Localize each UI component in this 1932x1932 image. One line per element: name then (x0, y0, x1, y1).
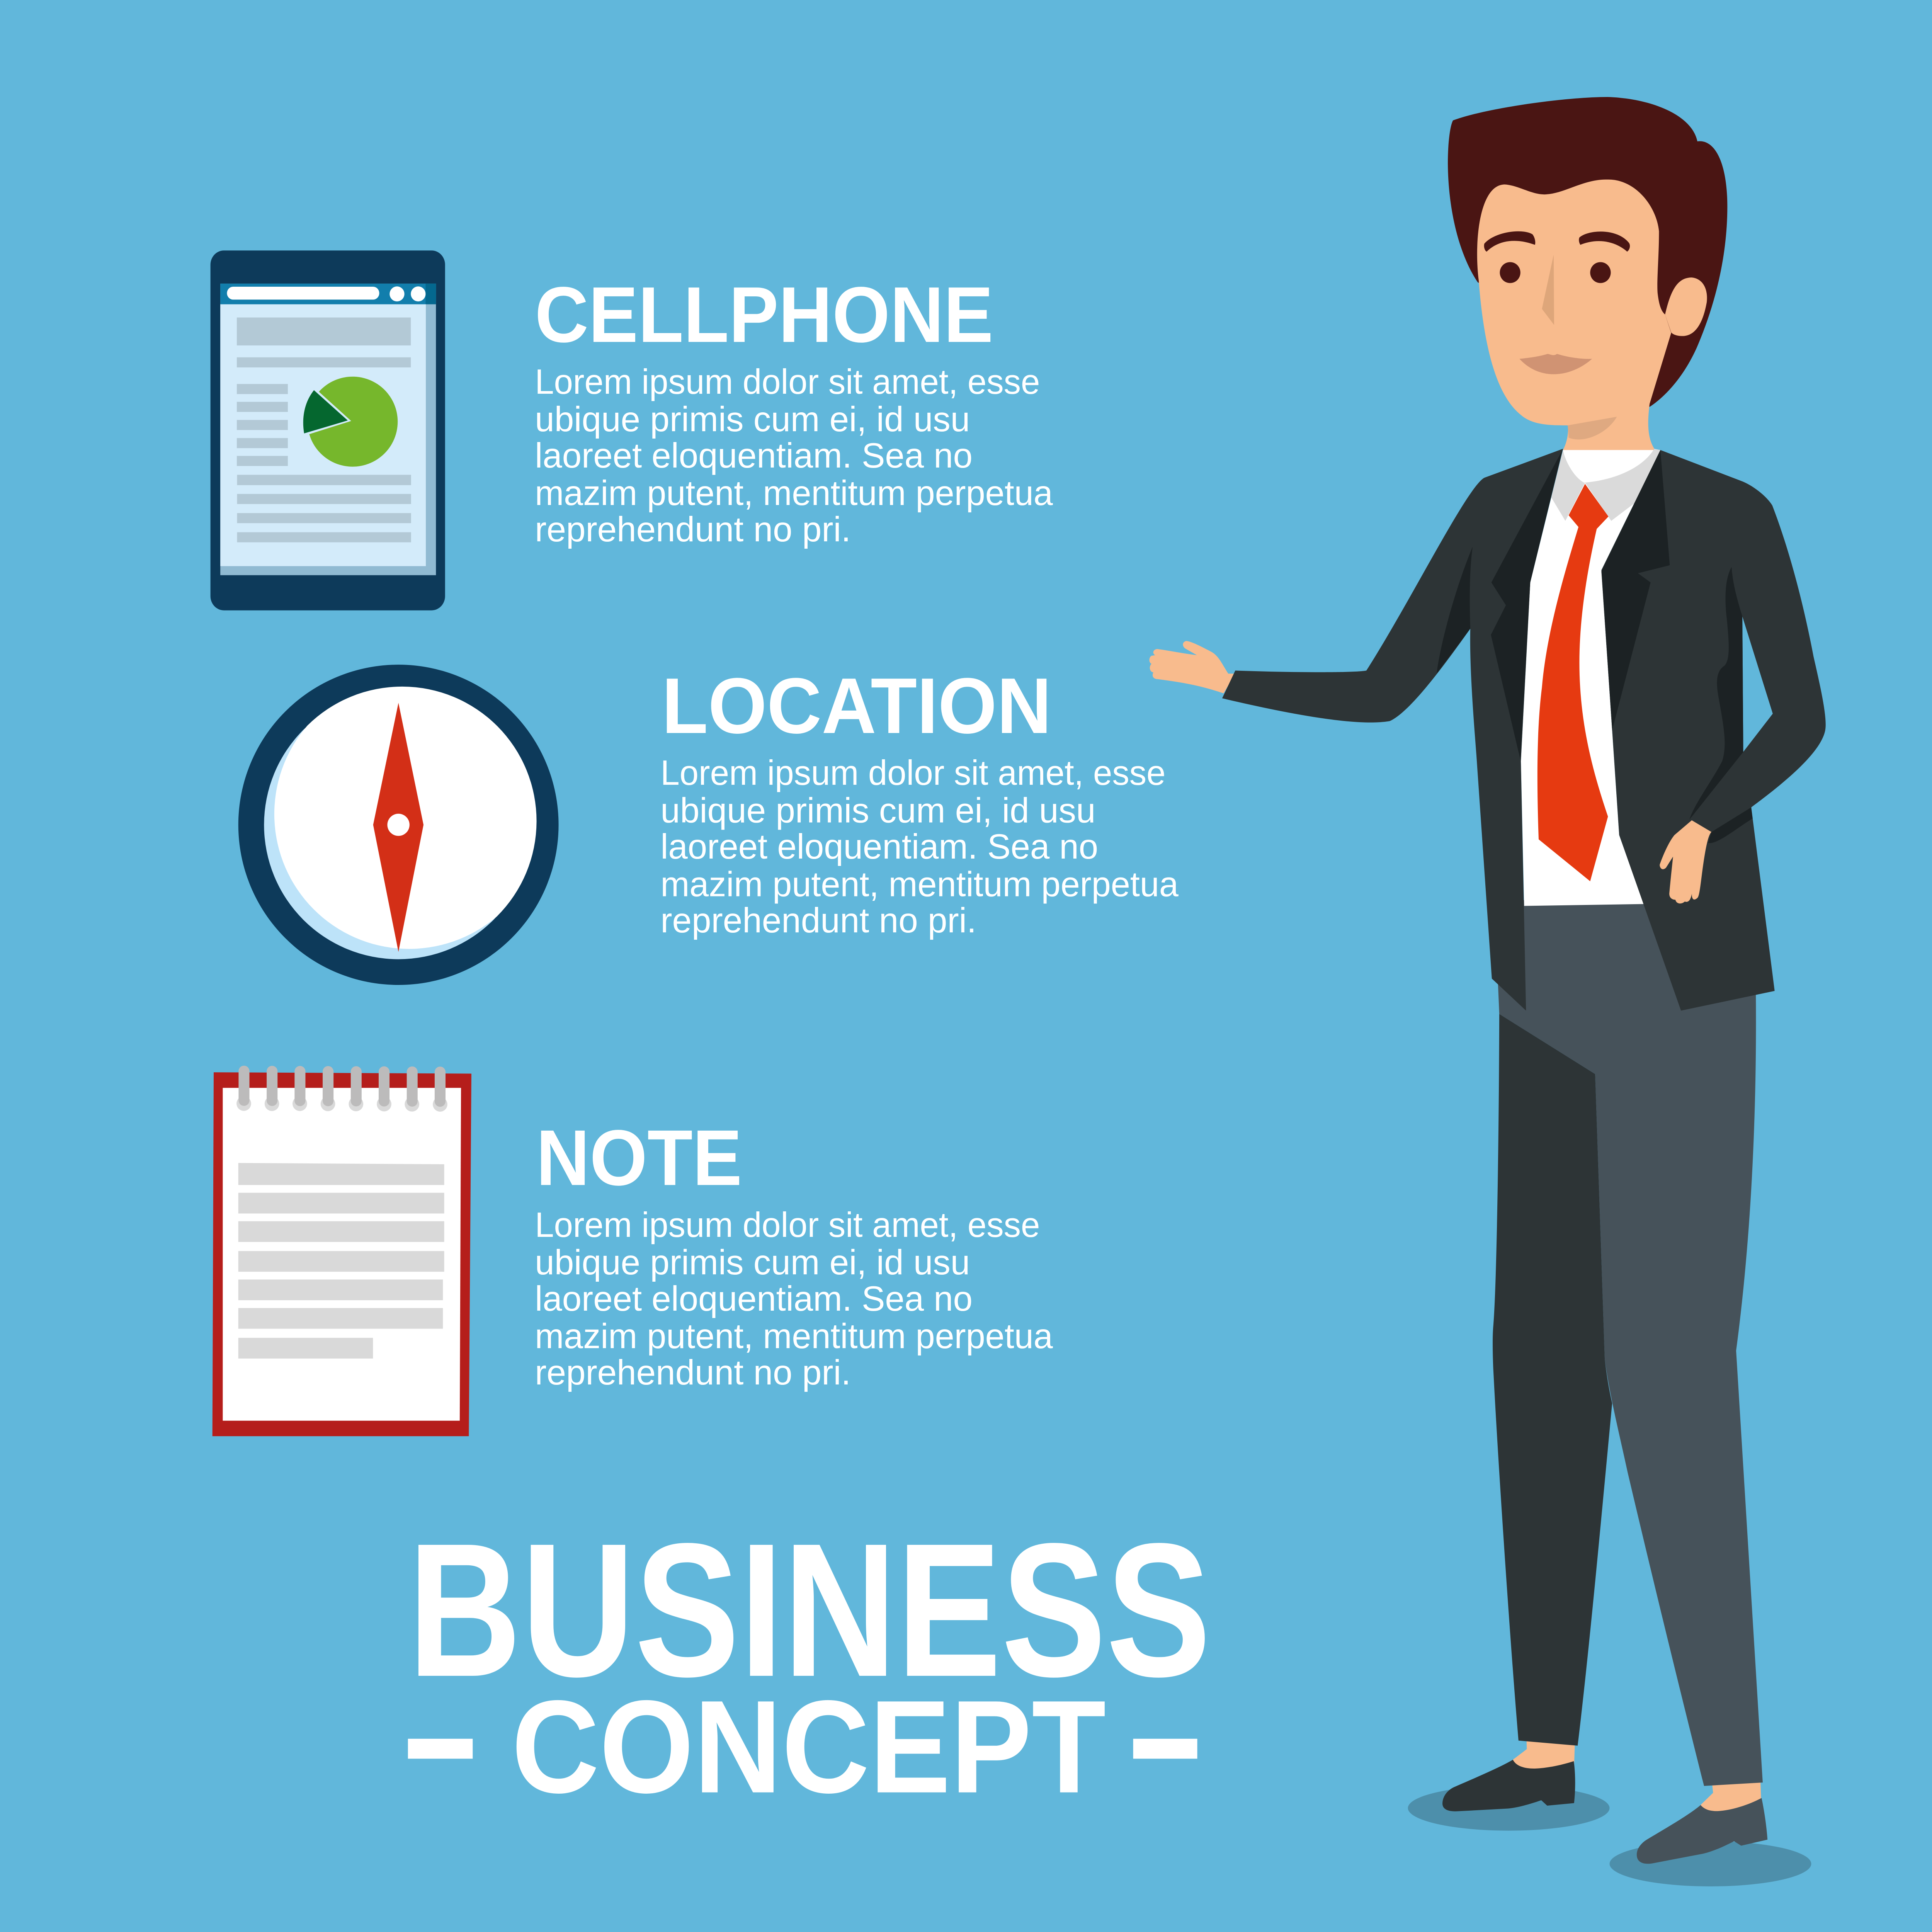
text block: location: mazim putent, mentitum perpetua (660, 865, 1179, 904)
right lapel (1601, 450, 1670, 730)
left hand (1150, 641, 1235, 693)
upper body and head (1150, 97, 1826, 1011)
jacket left side and extended arm (1222, 449, 1563, 1011)
title: business concept: BUSINESS (408, 1504, 1211, 1716)
nose (1542, 255, 1554, 325)
text block: location: ubique primis cum ei, id usu (660, 791, 1095, 830)
right hand (1660, 820, 1711, 903)
text block: cellphone: Lorem ipsum dolor sit amet, esse (535, 362, 1040, 401)
text block: note: reprehendunt no pri. (535, 1353, 851, 1392)
neck shadow (1568, 417, 1617, 439)
illustration: businessman (1150, 97, 1826, 1886)
ear (1665, 277, 1707, 336)
jacket fold shadow (1689, 567, 1743, 820)
title: business concept: CONCEPT (512, 1673, 1106, 1821)
trousers (1493, 900, 1763, 1786)
shirt collar (1551, 449, 1660, 521)
left lapel (1491, 451, 1562, 760)
icon: compass (238, 665, 559, 985)
text block: note: mazim putent, mentitum perpetua (535, 1317, 1053, 1356)
eyebrows (1484, 231, 1630, 252)
shirt (1521, 450, 1660, 906)
icon: spiral notepad (213, 1066, 471, 1436)
eyes (1500, 262, 1611, 283)
text block: location: laoreet eloquentiam. Sea no (660, 827, 1098, 866)
face and neck (1477, 180, 1671, 483)
text block: note: ubique primis cum ei, id usu (535, 1243, 970, 1282)
title: business concept (408, 1504, 1211, 1821)
text block: location: reprehendunt no pri. (660, 901, 976, 940)
hair (1448, 97, 1727, 407)
text block: cellphone: laoreet eloquentiam. Sea no (535, 436, 973, 475)
necktie (1537, 484, 1609, 881)
text block: cellphone: ubique primis cum ei, id usu (535, 400, 970, 439)
text block: cellphone: reprehendunt no pri. (535, 510, 851, 549)
heading: cellphone: CELLPHONE (535, 271, 993, 359)
text block: note (535, 1206, 1053, 1392)
gap between arm and body (1742, 616, 1773, 752)
icon: tablet cellphone (211, 250, 445, 611)
text block: location: Lorem ipsum dolor sit amet, esse (660, 753, 1165, 793)
text block: note: Lorem ipsum dolor sit amet, esse (535, 1206, 1040, 1245)
wrist shadow (1708, 807, 1753, 843)
arm shadow (1437, 547, 1473, 673)
text block: cellphone: mazim putent, mentitum perpetua (535, 474, 1053, 513)
heading: note: NOTE (536, 1114, 742, 1202)
text block: cellphone (535, 362, 1053, 549)
text block: note: laoreet eloquentiam. Sea no (535, 1279, 973, 1318)
mouth (1519, 354, 1592, 374)
feet and shadows (1408, 1738, 1811, 1886)
heading: location: LOCATION (662, 662, 1051, 750)
text block: location (660, 753, 1179, 940)
jacket right side and bent arm (1601, 450, 1826, 1011)
